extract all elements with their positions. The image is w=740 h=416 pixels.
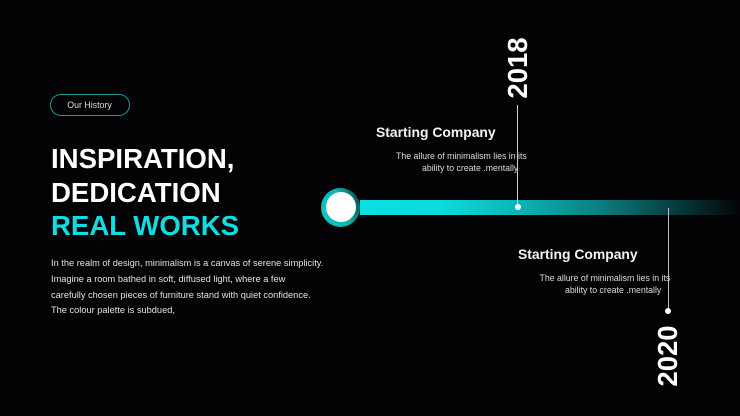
title line 1: INSPIRATION,	[51, 143, 234, 174]
body text: carefully chosen pieces of furniture stand with quiet confidence.	[51, 290, 311, 300]
title line 3: REAL WORKS	[51, 210, 239, 241]
connector dot 2018	[514, 204, 520, 210]
title line 2: DEDICATION	[51, 177, 221, 208]
body text: Imagine a room bathed in soft, diffused light, where a few	[51, 274, 285, 284]
year 2018: 2018	[502, 37, 532, 99]
body text: In the realm of design, minimalism is a canvas of serene simplicity.	[51, 258, 323, 268]
description 2018, line 2: ability to create .mentally	[422, 163, 518, 173]
pill badge: Our History: Our History	[67, 100, 112, 110]
node centre	[326, 192, 356, 222]
body text	[51, 258, 323, 315]
heading 2018: Starting Company	[376, 124, 496, 140]
timeline start node	[321, 188, 360, 227]
connector line 2020	[668, 208, 669, 310]
event 2018	[376, 37, 532, 210]
description 2020, line 2: ability to create .mentally	[565, 285, 661, 295]
connector line 2018	[517, 105, 518, 207]
pill badge: Our History	[50, 94, 130, 116]
timeline bar	[360, 200, 740, 215]
heading 2020: Starting Company	[518, 246, 638, 262]
event 2020	[518, 208, 682, 387]
title	[51, 143, 239, 241]
year 2020: 2020	[652, 325, 682, 387]
connector dot 2020	[665, 308, 671, 314]
body text: The colour palette is subdued,	[51, 305, 175, 315]
description 2020, line 1: The allure of minimalism lies in its	[540, 273, 670, 283]
description 2018, line 1: The allure of minimalism lies in its	[396, 151, 527, 161]
